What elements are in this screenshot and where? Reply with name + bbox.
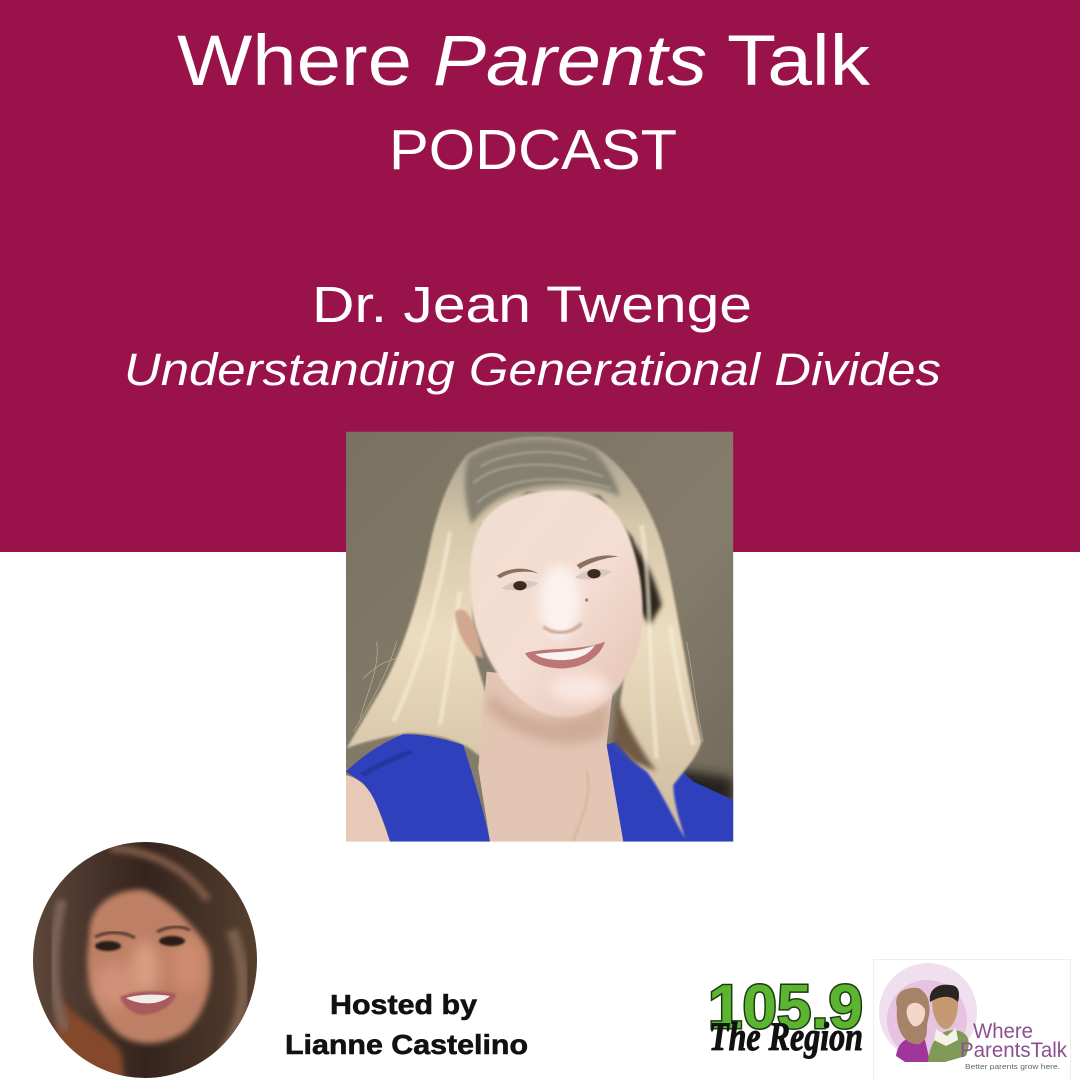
heading: PODCAST: PODCAST [389, 118, 677, 182]
logo: 105.9 The Region: The Region [709, 1014, 863, 1059]
guest name: Dr. Jean Twenge [312, 276, 752, 333]
logo: Where Parents Talk [874, 960, 1070, 1080]
episode subtitle: Understanding Generational Divides [124, 344, 941, 395]
logo: Where Parents Talk: Better parents grow here. [965, 1062, 1060, 1071]
title: Where Parents Talk [177, 22, 871, 101]
title: Where Parents Talk: Talk [727, 22, 871, 101]
host credit: Lianne Castelino [285, 1029, 528, 1060]
title: Where Parents Talk: Where [177, 22, 412, 101]
panel: maroon header band [0, 0, 1080, 552]
guest photo: Dr. Jean Twenge [346, 432, 733, 842]
logo: Where Parents Talk: ParentsTalk [960, 1039, 1067, 1062]
host credit [285, 989, 528, 1060]
logo: 105.9 The Region: 105.9 [708, 973, 863, 1042]
host photo: Lianne Castelino [30, 840, 260, 1080]
host credit: Hosted by [330, 989, 477, 1020]
logo: Where Parents Talk: Where [973, 1020, 1033, 1043]
title: Where Parents Talk: Parents [433, 22, 707, 101]
